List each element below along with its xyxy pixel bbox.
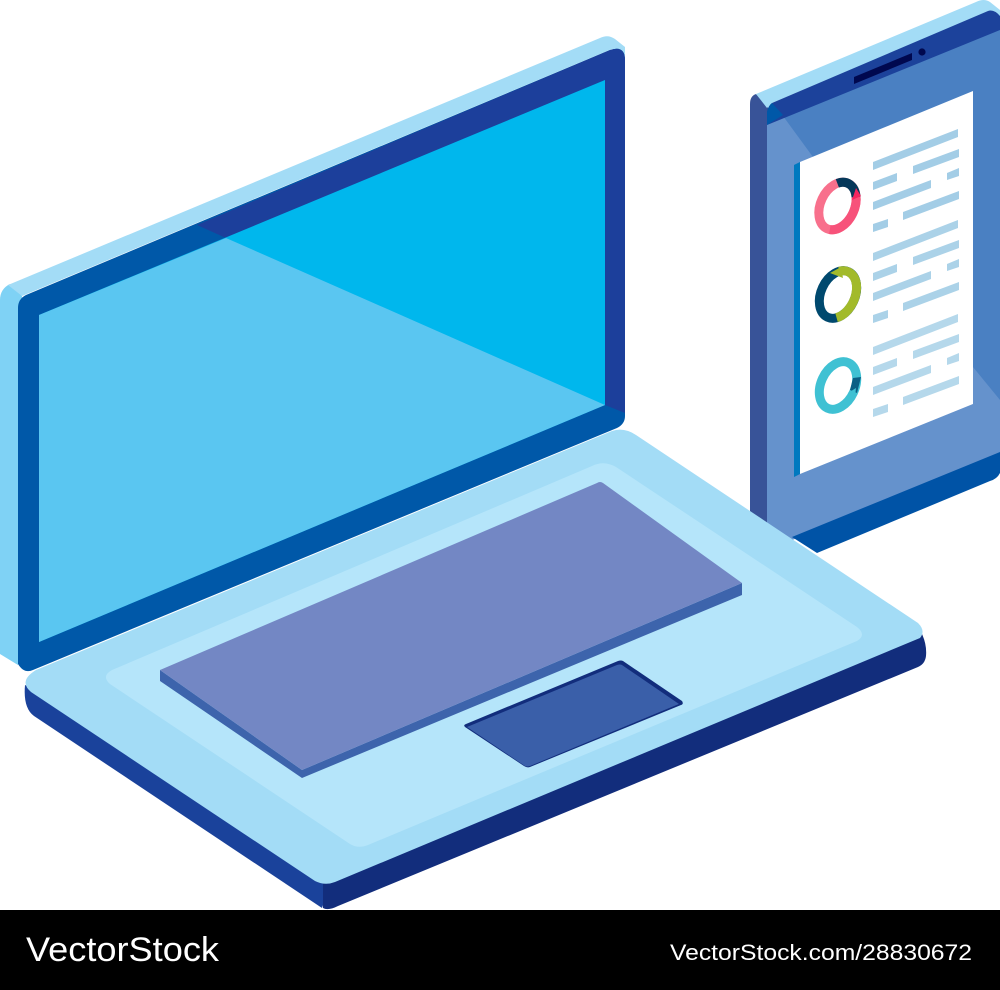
keyboard xyxy=(160,482,742,778)
text lines group 2 xyxy=(873,220,959,323)
trackpad recess xyxy=(464,660,683,767)
laptop lid frame xyxy=(18,49,625,671)
document shadow strip xyxy=(794,162,800,477)
trackpad xyxy=(464,660,683,767)
ring chart 2 xyxy=(812,265,864,324)
ring chart 3 xyxy=(812,356,864,415)
ring chart 1 xyxy=(812,176,863,236)
laptop lid top edge xyxy=(8,36,625,296)
document xyxy=(794,91,973,477)
text lines group 3 xyxy=(873,314,959,417)
tablet top edge xyxy=(756,0,1000,108)
laptop lid side xyxy=(0,284,22,665)
laptop base right side xyxy=(323,634,926,909)
trackpad surface xyxy=(467,664,679,766)
tablet bottom bezel xyxy=(792,452,1000,553)
tablet camera xyxy=(918,48,926,56)
keyboard top xyxy=(160,482,742,770)
laptop screen glare xyxy=(39,238,605,642)
laptop deck panel xyxy=(106,463,862,847)
footer logo text: VectorStock xyxy=(26,931,220,969)
footer url text: VectorStock.com/28830672 xyxy=(670,940,972,965)
keyboard edge xyxy=(160,583,742,778)
tablet bezel corner xyxy=(767,103,783,125)
laptop base top xyxy=(26,430,923,884)
text lines group 1 xyxy=(873,129,959,232)
tablet speaker xyxy=(854,53,912,84)
laptop base left side xyxy=(25,685,330,908)
laptop screen xyxy=(39,80,605,642)
tablet top bezel xyxy=(767,11,1000,125)
tablet xyxy=(750,0,1000,553)
tablet left side xyxy=(750,94,768,530)
laptop lid frame shade xyxy=(197,49,625,413)
footer bar xyxy=(0,910,1000,990)
tablet face highlight xyxy=(767,116,1000,540)
document page xyxy=(800,91,973,474)
tablet face xyxy=(767,28,1000,540)
